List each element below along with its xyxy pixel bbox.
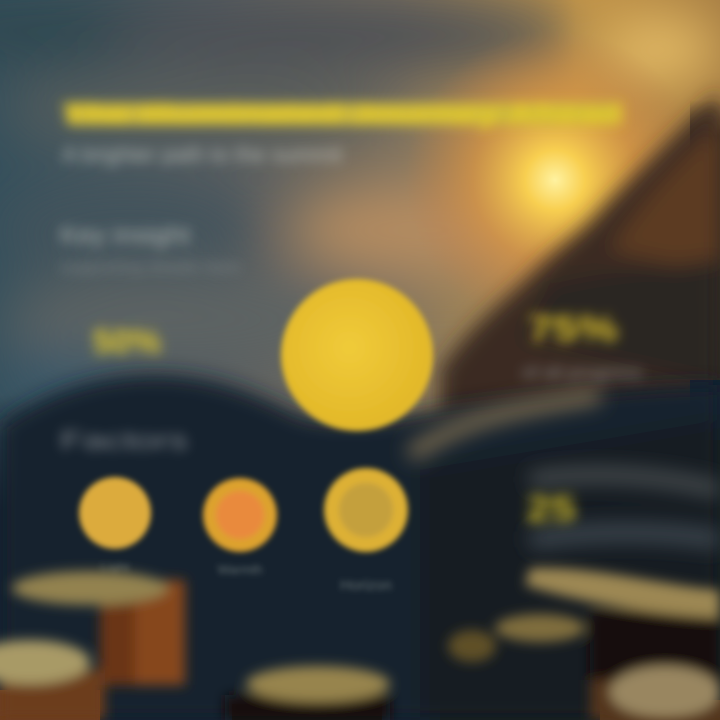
- text block: intro: supporting details here: [60, 259, 240, 276]
- stat: right yellow label: 75%: [528, 308, 618, 349]
- stone pillars bottom right: [448, 568, 720, 720]
- stone pillars bottom centre: [225, 666, 390, 720]
- icon: circle two: Warmth: [217, 562, 263, 577]
- dark foreground hills: [0, 375, 720, 720]
- terraced ledges on the right: [410, 395, 720, 540]
- large yellow circle: [281, 279, 433, 431]
- stat: right yellow label: of all progress: [522, 363, 642, 382]
- subtitle: A brighter path to the summit: [62, 142, 342, 167]
- icon: circle one: Light: [101, 560, 129, 575]
- mountain on the right: [440, 92, 720, 430]
- stat: left yellow label: 50%: [93, 323, 161, 361]
- icon: circle three: Horizon: [340, 577, 392, 594]
- icon: circle three: [324, 468, 408, 594]
- title: The Illuminated Journey Ahead: [62, 98, 624, 131]
- icon: circle one: [79, 477, 151, 575]
- text block: intro: Key insight: [60, 222, 190, 249]
- stone pillars bottom left: [0, 571, 185, 720]
- text block: intro: [60, 222, 240, 276]
- icon: circle two: [203, 478, 277, 577]
- stat: small yellow label: 25: [526, 488, 576, 529]
- heading: lower left: Factors: [60, 425, 188, 455]
- stat: right yellow label: [522, 308, 642, 382]
